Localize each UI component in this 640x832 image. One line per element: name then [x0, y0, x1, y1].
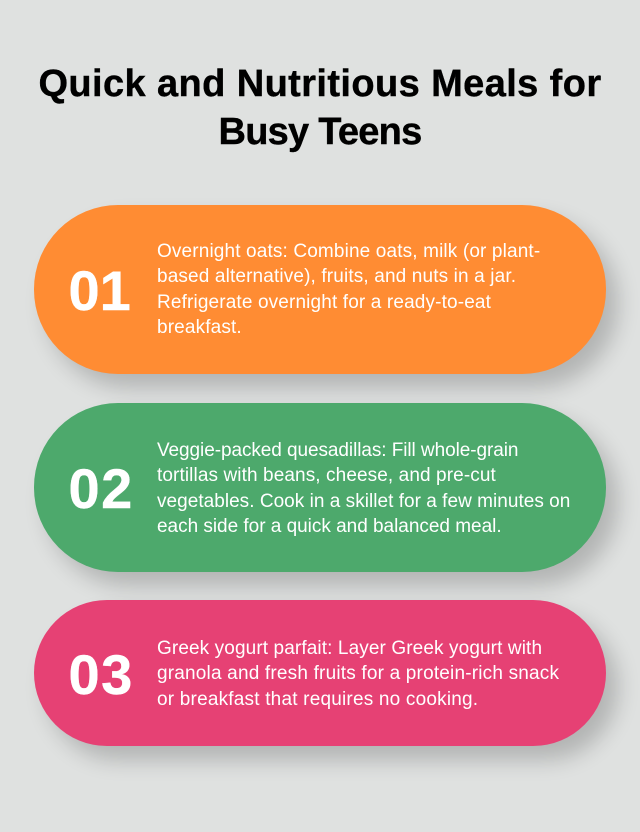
title: [38, 63, 602, 153]
title: Busy Teens: [218, 111, 421, 153]
number 03: 03: [68, 643, 134, 706]
panel: step 02 quesadillas: [34, 403, 606, 572]
text: overnight oats: breakfast.: [157, 317, 242, 338]
number 02: 02: [68, 457, 134, 520]
panel: step 01 overnight oats: [34, 205, 606, 374]
text: yogurt parfait: [157, 638, 559, 710]
text: overnight oats: [157, 241, 540, 338]
text: quesadillas: Veggie-packed quesadillas: Fill whole-grain: [157, 440, 518, 461]
text: overnight oats: Refrigerate overnight for a ready-to-eat: [157, 292, 491, 313]
text: quesadillas: tortillas with beans, cheese, and pre-cut: [157, 465, 496, 486]
text: yogurt parfait: granola and fresh fruits for a protein-rich snack: [157, 663, 559, 684]
text: quesadillas: vegetables. Cook in a skillet for a few minutes on: [157, 491, 570, 512]
text: quesadillas: each side for a quick and balanced meal.: [157, 516, 502, 537]
text: yogurt parfait: or breakfast that requires no cooking.: [157, 689, 478, 710]
text: overnight oats: Overnight oats: Combine oats, milk (or plant-: [157, 241, 540, 262]
panel: step 03 yogurt parfait: [34, 600, 606, 746]
number 01: 01: [68, 259, 131, 322]
text: yogurt parfait: Greek yogurt parfait: Layer Greek yogurt with: [157, 638, 542, 659]
title: Quick and Nutritious Meals for: [38, 63, 602, 105]
text: quesadillas: [157, 440, 570, 537]
text: overnight oats: based alternative), fruits, and nuts in a jar.: [157, 266, 516, 287]
